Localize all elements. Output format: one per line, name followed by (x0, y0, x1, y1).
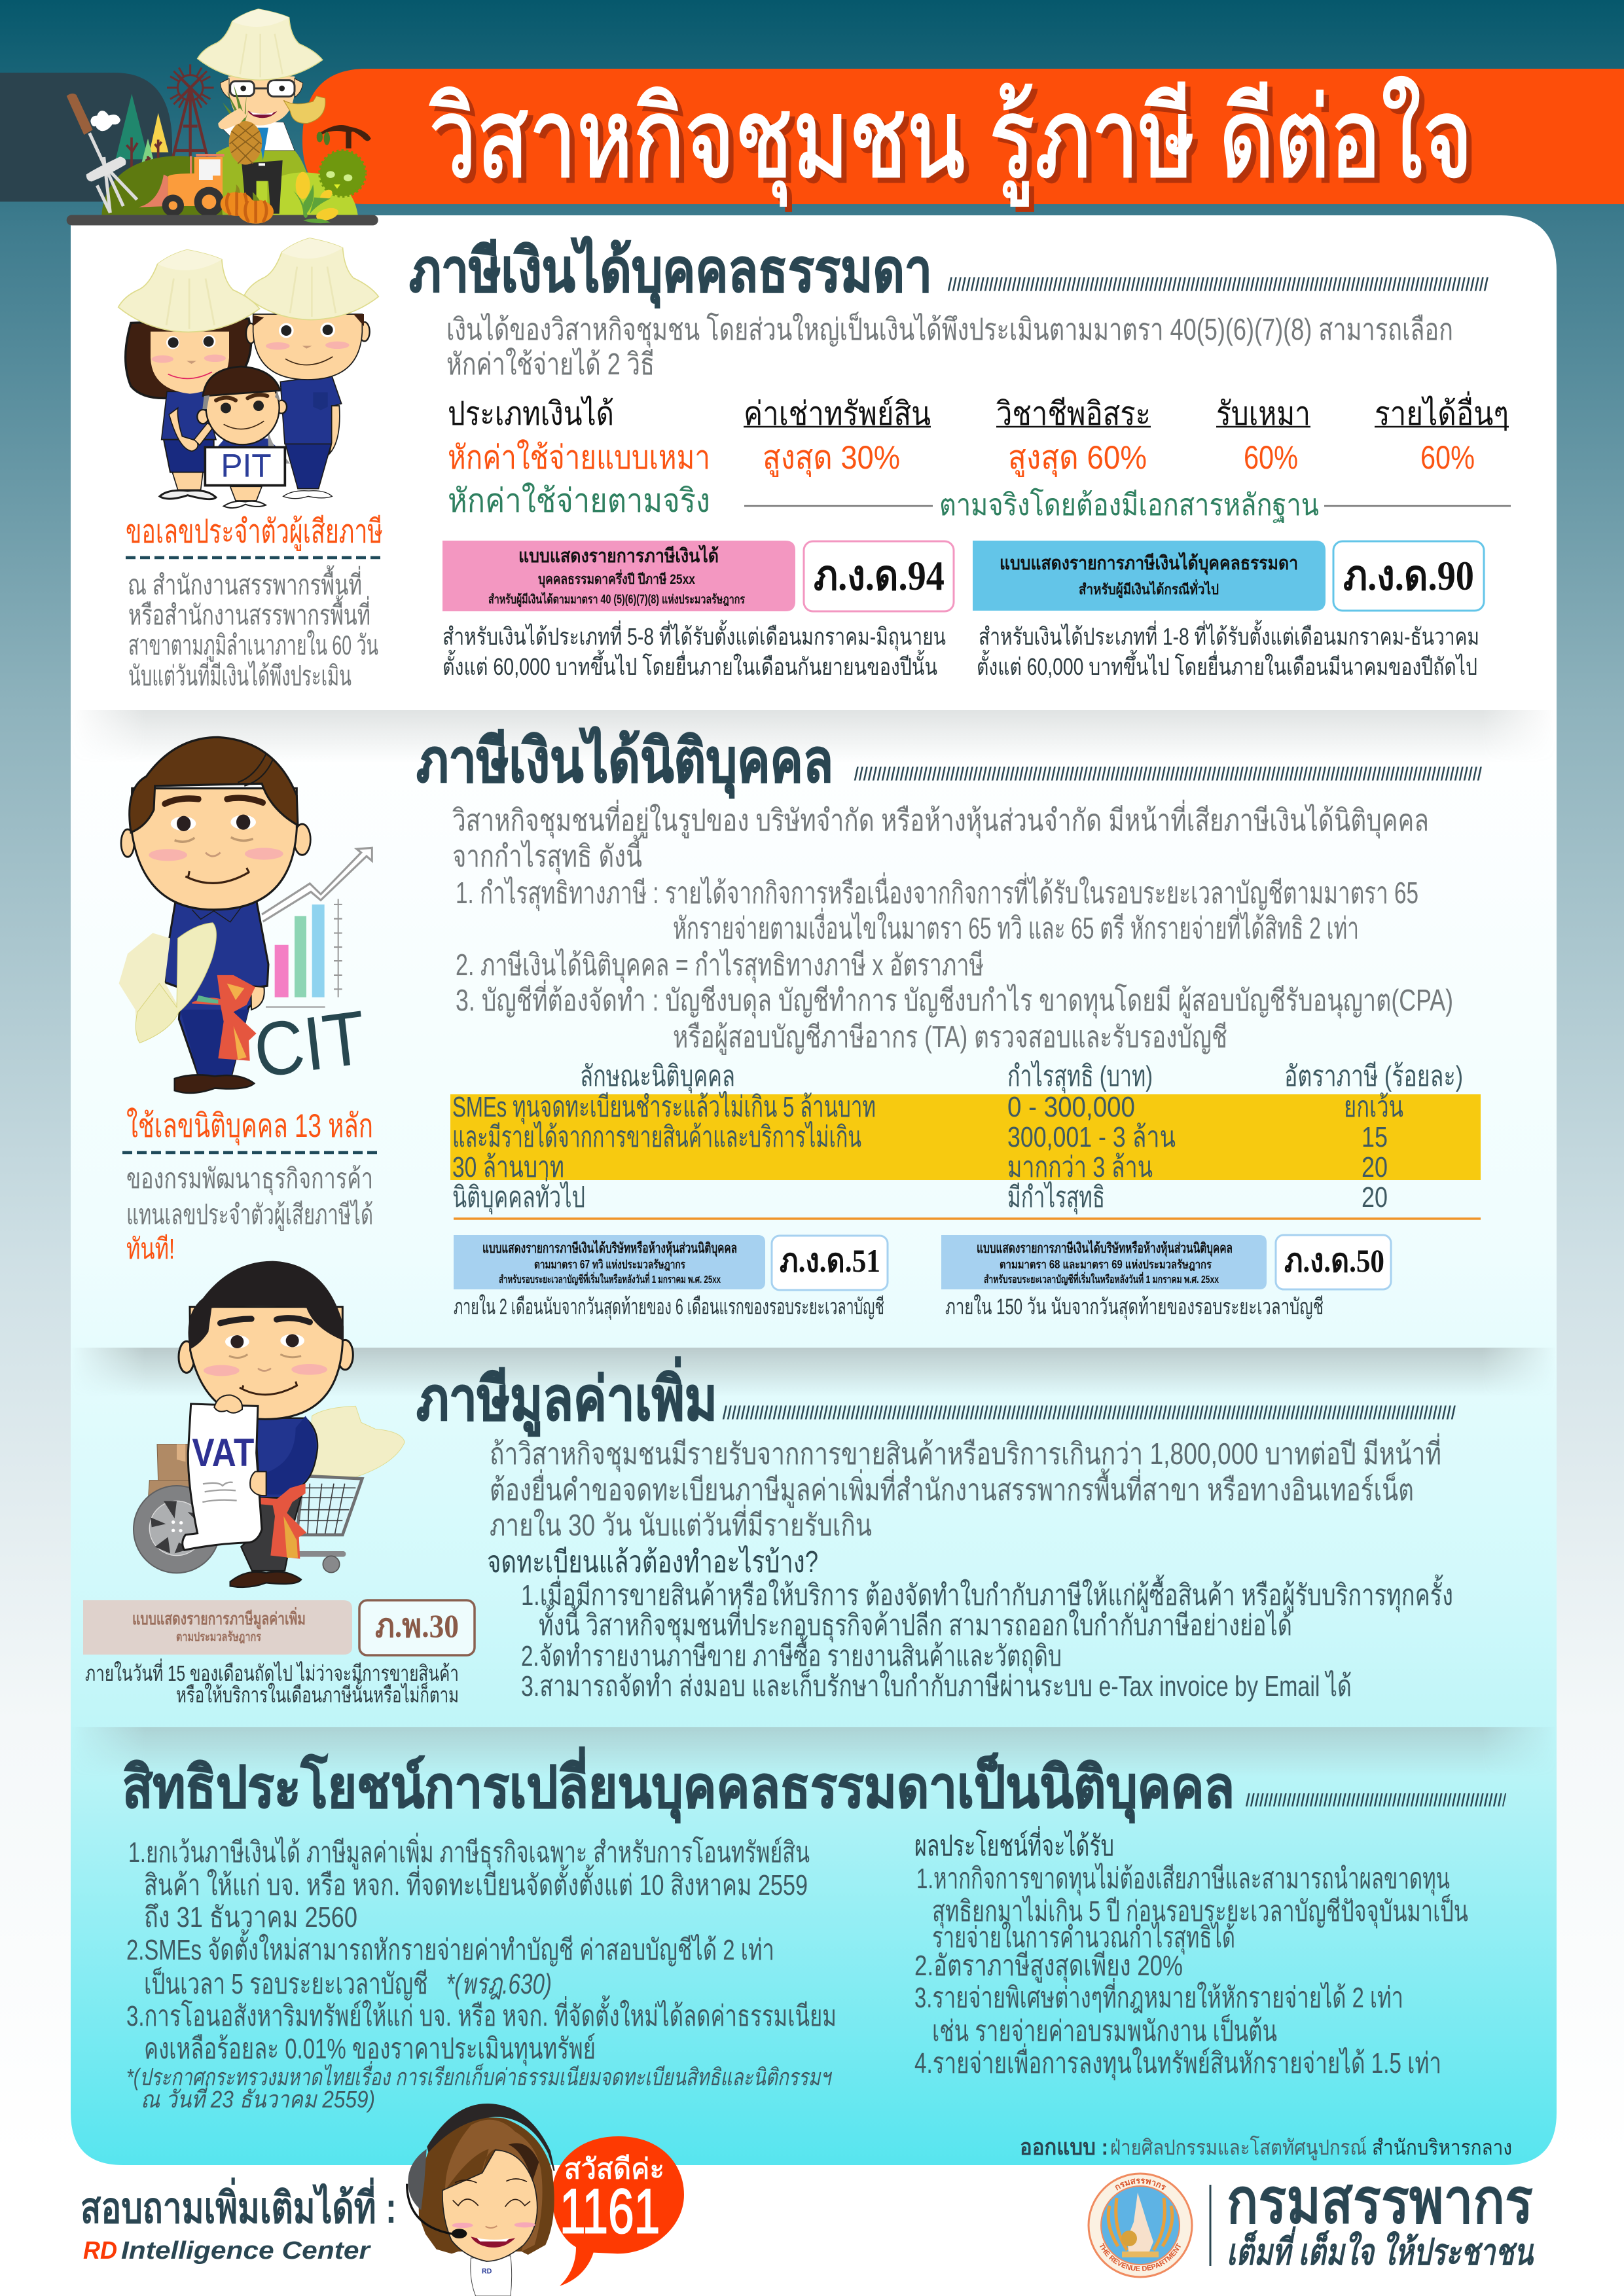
income-type table: สูงสุด 30% (763, 439, 900, 477)
form: PP30 (83, 1600, 475, 1655)
after-registration list: 2.จัดทำรายงานภาษีขาย ภาษีซื้อ รายงานสินค้าและวัตถุดิบ (521, 1635, 1062, 1674)
right column benefits: 4.รายจ่ายเพื่อการลงทุนในทรัพย์สินหักรายจ่ายได้ 1.5 เท่า (914, 2043, 1441, 2081)
hills (101, 139, 358, 215)
income-type table: รายได้อื่นๆ (1375, 391, 1509, 432)
form: PND51: ภ.ง.ด.51 (780, 1242, 880, 1279)
design credit: ฝ่ายศิลปกรรมและโสตทัศนูปกรณ์ (1110, 2136, 1367, 2161)
logo: Revenue Department seal: THE REVENUE DEPARTMENT (1100, 2242, 1181, 2271)
hatch (949, 278, 1487, 291)
organisation name: เต็มที่ เต็มใจ ให้ประชาชน (1227, 2226, 1534, 2272)
document: VAT (192, 1431, 254, 1475)
head (179, 1341, 194, 1372)
form notes: สำหรับเงินได้ประเภทที่ 5-8 ที่ได้รับตั้งแต่เดือนมกราคม-มิถุนายน (442, 619, 946, 651)
footer: contact: RD (83, 2237, 117, 2265)
form: PND90: สำหรับผู้มีเงินได้กรณีทั่วไป (1079, 579, 1219, 599)
sash (192, 975, 257, 1061)
hatch (856, 767, 1483, 780)
footer: contact: Intelligence Center (121, 2237, 371, 2265)
footer: contact: สอบถามเพิ่มเติมได้ที่ : (81, 2177, 397, 2232)
icon: trees (116, 94, 168, 171)
after-registration list (487, 1545, 1453, 1702)
left column benefits: *(ประกาศกระทรวงมหาดไทยเรื่อง การเรียกเก็บค่าธรรมเนียมจดทะเบียนสิทธิและนิติกรรมฯ (126, 2060, 833, 2090)
form: PND94: บุคคลธรรมดาครึ่งปี ปีภาษี 25xx (538, 569, 695, 588)
design credit (1020, 2135, 1512, 2161)
sign (205, 447, 285, 486)
shirt (471, 2256, 512, 2296)
icon: durian (316, 125, 371, 196)
form: PP30: ตามประมวลรัษฎากร (176, 1630, 262, 1644)
orange title banner (302, 69, 1624, 204)
wheel (134, 1486, 220, 1573)
left column benefits: คงเหลือร้อยละ 0.01% ของราคาประเมินทุนทรัพย์ (144, 2033, 596, 2066)
form: PND51: ตามมาตรา 67 ทวิ แห่งประมวลรัษฎากร (534, 1258, 685, 1271)
tax rate table: ลักษณะนิติบุคคล (580, 1060, 735, 1094)
hair (419, 2117, 554, 2255)
income-type table: สูงสุด 60% (1008, 439, 1147, 477)
income-type table: 60% (1244, 439, 1298, 476)
tax rate table: 20 (1362, 1181, 1388, 1213)
income-type table: 60% (1420, 439, 1475, 476)
right column benefits: รายจ่ายในการคำนวณกำไรสุทธิได้ (932, 1921, 1235, 1955)
after-registration list: ทั้งนี้ วิสาหกิจชุมชนที่ประกอบธุรกิจค้าปลีก สามารถออกใบกำกับภาษีอย่างย่อได้ (539, 1604, 1292, 1643)
income-type table: ค่าเช่าทรัพย์สิน (744, 395, 931, 432)
form: PND51: สำหรับรอบระยะเวลาบัญชีที่เริ่มในหรือหลังวันที่ 1 มกราคม พ.ศ. 25xx (499, 1272, 721, 1286)
taxpayer ID note: นับแต่วันที่มีเงินได้พึงประเมิน (128, 657, 352, 691)
company ID note: ทันที! (126, 1233, 175, 1265)
intro text (452, 799, 1453, 1055)
icon: tractor (139, 154, 225, 217)
father (280, 375, 342, 444)
hat (198, 9, 323, 80)
intro text (446, 312, 1453, 381)
icon: fork tool (67, 94, 137, 213)
trousers (241, 1497, 301, 1571)
form deadlines: ภายใน 2 เดือนนับจากวันสุดท้ายของ 6 เดือนแรกของรอบระยะเวลาบัญชี (454, 1294, 884, 1320)
form: PND50: ภ.ง.ด.50 (1284, 1242, 1384, 1279)
section 4: benefits of converting to juristic person (122, 1747, 1512, 2161)
speech bubble (552, 2136, 684, 2286)
form deadlines: ภายใน 150 วัน นับจากวันสุดท้ายของรอบระยะเวลาบัญชี (945, 1294, 1324, 1320)
logo: Revenue Department seal (1088, 2173, 1193, 2278)
intro text: 2. ภาษีเงินได้นิติบุคคล = กำไรสุทธิทางภาษี x อัตราภาษี (456, 948, 984, 984)
document (183, 1395, 266, 1550)
organisation name (1227, 2166, 1534, 2272)
company ID note: แทนเลขประจำตัวผู้เสียภาษีได้ (126, 1199, 373, 1231)
form: PP30: ภ.พ.30 (375, 1607, 459, 1644)
form: PND51 (454, 1235, 888, 1290)
icon: pumpkins (221, 185, 274, 224)
footer: contact (81, 2177, 397, 2265)
child (230, 486, 262, 501)
icon: pineapple (218, 84, 262, 165)
arrow (262, 848, 372, 922)
hatch (1247, 1793, 1505, 1806)
heading: ภาษีเงินได้บุคคลธรรมดา (409, 236, 932, 308)
income-type table: ประเภทเงินได้ (448, 395, 614, 432)
intro text: หรือผู้สอบบัญชีภาษีอากร (TA) ตรวจสอบและรับรองบัญชี (673, 1020, 1227, 1055)
figure: farmer body (221, 77, 303, 214)
form: PND90 (973, 541, 1484, 611)
after-registration list: 3.สามารถจัดทำ ส่งมอบ และเก็บรักษาใบกำกับภาษีผ่านระบบ e-Tax invoice by Email ได้ (521, 1669, 1352, 1702)
form: PND94 (442, 541, 954, 611)
company ID note (122, 1107, 380, 1265)
tax rate table: 300,001 - 3 ล้าน (1007, 1121, 1176, 1153)
form deadline (85, 1659, 459, 1707)
hat behind (310, 1406, 405, 1477)
form deadline: ภายในวันที่ 15 ของเดือนถัดไป ไม่ว่าจะมีการขายสินค้า (85, 1659, 459, 1685)
form notes (442, 619, 1479, 680)
face (442, 2150, 537, 2261)
tax rate table: อัตราภาษี (ร้อยละ) (1284, 1060, 1463, 1092)
left column benefits: 2.SMEs จัดตั้งใหม่สามารถหักรายจ่ายค่าทำบัญชี ค่าสอบบัญชีได้ 2 เท่า (126, 1929, 774, 1966)
headset (427, 2104, 554, 2171)
tax rate table: 30 ล้านบาท (452, 1151, 564, 1183)
taxpayer ID note: สาขาตามภูมิลำเนาภายใน 60 วัน (128, 630, 378, 662)
income-type table: ตามจริงโดยต้องมีเอกสารหลักฐาน (939, 488, 1319, 523)
income-type table: หักค่าใช้จ่ายแบบเหมา (448, 439, 710, 476)
heading: ภาษีมูลค่าเพิ่ม (416, 1356, 717, 1437)
form notes: ตั้งแต่ 60,000 บาทขึ้นไป โดยยื่นภายในเดือนมีนาคมของปีถัดไป (977, 649, 1477, 680)
form: PND50: สำหรับรอบระยะเวลาบัญชีที่เริ่มในหรือหลังวันที่ 1 มกราคม พ.ศ. 25xx (984, 1272, 1219, 1286)
figure: VAT man with cart (134, 1261, 405, 1587)
icon: corn (293, 172, 340, 223)
heading: สิทธิประโยชน์การเปลี่ยนบุคคลธรรมดาเป็นนิติบุคคล (122, 1747, 1235, 1823)
mother (126, 319, 251, 398)
tax rate table: นิติบุคคลทั่วไป (452, 1177, 585, 1215)
tax rate table: ยกเว้น (1344, 1091, 1403, 1123)
design credit: ออกแบบ : (1020, 2135, 1108, 2160)
taxpayer ID note: ณ สำนักงานสรรพากรพื้นที่ (128, 565, 362, 600)
form notes: สำหรับเงินได้ประเภทที่ 1-8 ที่ได้รับตั้งแต่เดือนมกราคม-ธันวาคม (979, 619, 1479, 650)
income-type table: รับเหมา (1216, 395, 1310, 432)
form deadline: หรือให้บริการในเดือนภาษีนั้นหรือไม่ก็ตาม (176, 1679, 459, 1707)
section 2: corporate income tax (119, 726, 1483, 1320)
boxes (149, 1444, 190, 1497)
tax rate table (450, 1060, 1481, 1219)
hatch (724, 1406, 1455, 1419)
income-type table (448, 391, 1511, 523)
section 1: personal income tax (118, 236, 1511, 691)
left column benefits: 3.การโอนอสังหาริมทรัพย์ให้แก่ บจ. หรือ หจก. ที่จัดตั้งใหม่ได้ลดค่าธรรมเนียม (126, 1995, 837, 2032)
tax rate table: มากกว่า 3 ล้าน (1007, 1151, 1153, 1183)
icon: windmill (167, 64, 214, 164)
figure: call centre agent with speech bubble (407, 2104, 684, 2296)
illustration: farmer with crops (67, 9, 378, 225)
right column benefits: เช่น รายจ่ายค่าอบรมพนักงาน เป็นต้น (932, 2014, 1277, 2047)
after-registration list: จดทะเบียนแล้วต้องทำอะไรบ้าง? (487, 1545, 818, 1579)
figure: call centre agent with speech bubble: RD (482, 2267, 492, 2275)
shirt (255, 1418, 317, 1498)
left column benefits: เป็นเวลา 5 รอบระยะเวลาบัญชี *(พรฎ.630) (144, 1967, 552, 2000)
form: PND94: ภ.ง.ด.94 (814, 552, 945, 599)
icon: cloud (90, 111, 120, 131)
CIT label: CIT (250, 994, 370, 1094)
company ID note: ของกรมพัฒนาธุรกิจการค้า (126, 1163, 373, 1196)
form: PND90: ภ.ง.ด.90 (1343, 552, 1474, 599)
left column benefits: สินค้า ให้แก่ บจ. หรือ หจก. ที่จดทะเบียนจัดตั้งตั้งแต่ 10 สิงหาคม 2559 (144, 1864, 808, 1901)
intro text: ภายใน 30 วัน นับแต่วันที่มีรายรับเกิน (490, 1504, 872, 1542)
tax rate table: 15 (1362, 1121, 1388, 1153)
taxpayer ID note: หรือสำนักงานสรรพากรพื้นที่ (128, 595, 370, 630)
left column benefits (126, 1832, 837, 2113)
figure: PIT family: PIT (221, 447, 272, 484)
design credit: สำนักบริหารกลาง (1372, 2136, 1512, 2159)
right column benefits: 2.อัตราภาษีสูงสุดเพียง 20% (914, 1950, 1183, 1983)
figure: call centre agent with speech bubble: 1161 (560, 2176, 660, 2247)
form: PP30: แบบแสดงรายการภาษีมูลค่าเพิ่ม (132, 1606, 306, 1630)
form notes: ตั้งแต่ 60,000 บาทขึ้นไป โดยยื่นภายในเดือนกันยายนของปีนั้น (442, 649, 937, 680)
figure: call centre agent with speech bubble: สวัสดีค่ะ (564, 2153, 664, 2185)
left column benefits: 1.ยกเว้นภาษีเงินได้ ภาษีมูลค่าเพิ่ม ภาษีธุรกิจเฉพาะ สำหรับการโอนทรัพย์สิน (128, 1832, 810, 1870)
head (121, 829, 134, 857)
right column benefits: 3.รายจ่ายพิเศษต่างๆที่กฎหมายให้หักรายจ่ายได้ 2 เท่า (914, 1977, 1403, 2014)
tax rate table: มีกำไรสุทธิ (1007, 1181, 1105, 1215)
section 3: VAT (83, 1261, 1455, 1707)
intro text (490, 1433, 1441, 1542)
company ID note: ใช้เลขนิติบุคคล 13 หลัก (126, 1107, 373, 1145)
shelf (67, 215, 378, 225)
section divider shadows (71, 710, 1557, 1776)
intro text: ต้องยื่นคำขอจดทะเบียนภาษีมูลค่าเพิ่มที่สำนักงานสรรพากรพื้นที่สาขา หรือทางอินเทอร์เน็ต (490, 1468, 1414, 1508)
form: PND50: ตามมาตรา 68 และมาตรา 69 แห่งประมวลรัษฎากร (1000, 1258, 1212, 1271)
tax rate table: 20 (1362, 1151, 1388, 1183)
hat held (119, 923, 216, 1043)
tax rate table: กำไรสุทธิ (บาท) (1007, 1060, 1153, 1094)
dark block behind illustration (0, 73, 172, 202)
divider (1210, 2185, 1211, 2266)
form: PND51: แบบแสดงรายการภาษีเงินได้บริษัทหรือห้างหุ้นส่วนนิติบุคคล (482, 1240, 737, 1257)
intro text: หักค่าใช้จ่ายได้ 2 วิธี (446, 347, 655, 381)
figure: CIT man with chart (119, 737, 372, 1094)
left column benefits: ถึง 31 ธันวาคม 2560 (144, 1901, 357, 1933)
right column benefits (914, 1825, 1468, 2081)
heading: ภาษีเงินได้นิติบุคคล (416, 726, 833, 798)
left column benefits: ณ วันที่ 23 ธันวาคม 2559) (141, 2083, 375, 2113)
body (165, 900, 268, 1076)
taxpayer ID note (126, 513, 383, 691)
form: PND50: แบบแสดงรายการภาษีเงินได้บริษัทหรือห้างหุ้นส่วนนิติบุคคล (977, 1240, 1233, 1257)
form: PND94: แบบแสดงรายการภาษีเงินได้ (518, 545, 719, 567)
income-type table: วิชาชีพอิสระ (996, 395, 1151, 432)
tax rate table: และมีรายได้จากการขายสินค้าและบริการไม่เกิน (452, 1121, 861, 1153)
organisation name: กรมสรรพากร (1227, 2166, 1533, 2236)
intro text: จากกำไรสุทธิ ดังนี้ (452, 834, 642, 875)
income-type table: หักค่าใช้จ่ายตามจริง (448, 482, 710, 519)
tax rate table: 0 - 300,000 (1007, 1091, 1135, 1123)
form: PND90: แบบแสดงรายการภาษีเงินได้บุคคลธรรมดา (1000, 552, 1298, 575)
cart (297, 1476, 362, 1573)
logo: Revenue Department seal: กรมสรรพากร (1115, 2178, 1166, 2191)
taxpayer ID note: ขอเลขประจำตัวผู้เสียภาษี (126, 513, 383, 551)
bars (266, 899, 342, 1007)
sash (261, 1484, 306, 1559)
icon: bananas (283, 96, 325, 123)
form: PND50 (941, 1235, 1391, 1289)
figure: PIT family (118, 238, 378, 508)
form: PND94: สำหรับผู้มีเงินได้ตามมาตรา 40 (5)(6)(7)(8) แห่งประมวลรัษฎากร (488, 592, 746, 607)
main white panel (71, 215, 1557, 2165)
right column benefits: ผลประโยชน์ที่จะได้รับ (914, 1825, 1114, 1862)
tax rate table: SMEs ทุนจดทะเบียนชำระแล้วไม่เกิน 5 ล้านบาท (452, 1090, 876, 1124)
